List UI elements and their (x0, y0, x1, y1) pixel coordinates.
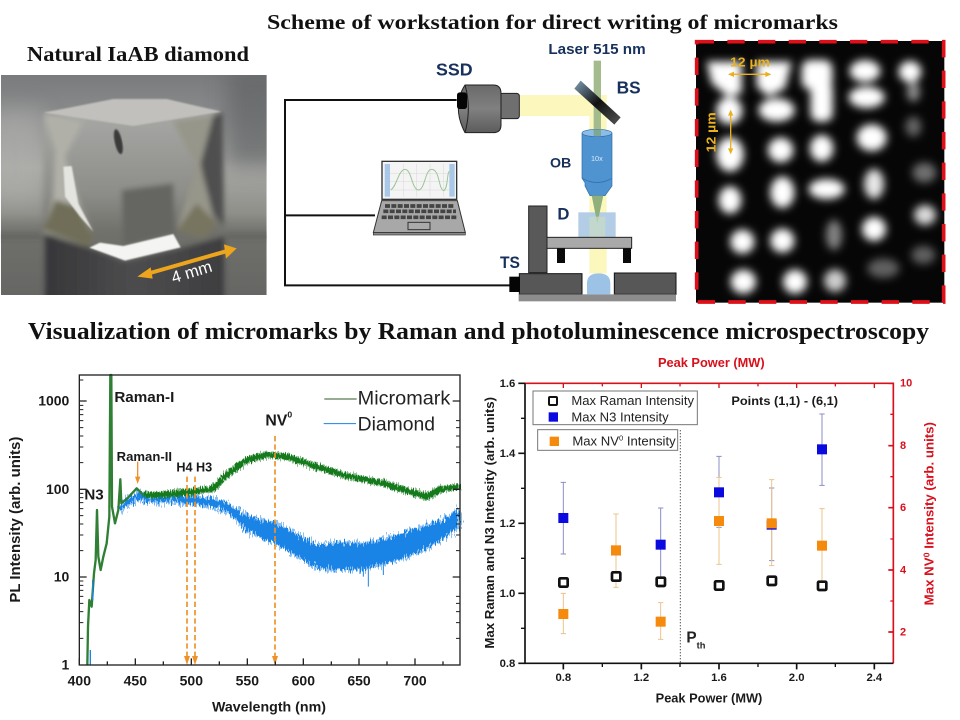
peak labels: NV (265, 412, 288, 429)
diamond spectrum (120, 492, 460, 570)
diamond spike (315, 557, 383, 587)
bright micromark spots (707, 60, 936, 294)
title: scheme of workstation: Scheme of workstation for direct writing of micromarks (267, 10, 838, 34)
x tick labels: 550 (236, 673, 259, 689)
bright reflection (63, 166, 93, 232)
threshold subscript: th (697, 641, 706, 651)
peak labels: 0 (287, 409, 292, 419)
chart: intensity versus peak power (482, 356, 936, 706)
left y tick labels: 1.6 (500, 378, 515, 390)
label: BS: BS (617, 77, 641, 97)
peak labels: H3 (196, 461, 212, 475)
title: natural diamond: Natural IaAB diamond (27, 42, 249, 66)
axes (518, 383, 893, 669)
spectrum legend: Diamond (358, 414, 435, 435)
legend: NV0: 0 (619, 434, 623, 443)
left axis title: Max Raman and N3 Intensity (arb. units) (482, 397, 497, 649)
panel: micromark image (696, 41, 944, 303)
x tick labels: 450 (124, 673, 147, 689)
detector SSD (457, 85, 519, 133)
x tick labels: 600 (292, 673, 315, 689)
right y tick labels: 10 (900, 378, 912, 390)
right axis title: 0 (921, 552, 931, 557)
label: TS: TS (500, 253, 520, 272)
legend: NV0 (538, 430, 678, 450)
bottom bright facet (89, 234, 181, 261)
connection wires (285, 100, 510, 285)
left y tick labels: 1.0 (500, 588, 515, 600)
x tick labels: 1.2 (633, 672, 649, 684)
spectrum legend: Micromark (358, 389, 451, 410)
threshold label: P (686, 630, 697, 647)
label: SSD: SSD (436, 59, 473, 79)
y tick labels: 10 (54, 569, 70, 585)
x tick labels: 2.4 (866, 672, 883, 684)
peak labels (84, 389, 292, 504)
chart: PL spectrum (8, 375, 460, 714)
x tick labels: 650 (347, 673, 371, 689)
x tick labels: 700 (403, 673, 427, 689)
Raman points (559, 572, 826, 590)
legend: Raman and N3: Max Raman Intensity (571, 394, 695, 408)
label: laser: Laser 515 nm (548, 42, 646, 58)
objective lens (582, 129, 612, 196)
x tick labels: 400 (68, 673, 91, 689)
x tick labels (68, 673, 427, 689)
title: visualization: Visualization of micromarks by Raman and photoluminescence microspectroscopy (28, 319, 929, 345)
legend: NV0: Intensity (623, 434, 676, 448)
bottom axis title: Peak Power (MW) (656, 692, 762, 706)
peak labels: Raman-I (114, 389, 174, 406)
y axis title: PL Intensity (arb. units) (8, 437, 24, 603)
right axis title: Intensity (arb. units) (921, 422, 936, 552)
y tick labels (38, 393, 70, 673)
label: OB: OB (550, 154, 571, 170)
horizontal 12 µm marker (728, 55, 771, 77)
green laser beam (594, 61, 601, 136)
error bars: NV0 (561, 477, 825, 639)
right y tick labels: 2 (900, 626, 906, 638)
diamond top face (43, 99, 222, 126)
left y tick labels: 1.2 (500, 518, 515, 530)
x tick labels: 2.0 (789, 672, 805, 684)
horizontal 12 µm marker: 12 µm (730, 55, 770, 69)
NV0 points (558, 516, 827, 627)
laptop (373, 161, 465, 235)
peak labels: N3 (84, 487, 104, 504)
beam splitter (574, 81, 621, 125)
right y tick labels: 6 (900, 502, 906, 514)
legend: Raman and N3: Max N3 Intensity (571, 410, 669, 424)
diamond inclusion (113, 128, 124, 155)
x tick labels: 1.6 (711, 672, 727, 684)
right y tick labels: 8 (900, 440, 906, 452)
legend: NV0: Max NV (572, 434, 617, 448)
translation stage (509, 206, 676, 301)
arrow: 4 mm scale (137, 244, 237, 279)
left y tick labels (500, 378, 516, 670)
diamond sample (578, 212, 616, 237)
dashed marker lines (187, 436, 275, 658)
left y tick labels: 1.4 (500, 448, 516, 460)
panel: diamond photograph (0, 67, 283, 300)
marker arrowheads (135, 462, 278, 665)
y tick labels: 100 (46, 481, 70, 497)
x tick labels: 500 (180, 673, 203, 689)
micromark spectrum (143, 455, 460, 497)
threshold line (679, 430, 682, 663)
label: D: D (557, 204, 569, 223)
yellow beam (520, 95, 607, 273)
vertical 12 µm marker (704, 110, 733, 154)
y tick labels: 1000 (38, 393, 70, 409)
vertical 12 µm marker: 12 µm (704, 112, 718, 152)
focused green cone (592, 196, 603, 223)
blue edge (90, 580, 93, 665)
x tick labels: 0.8 (555, 672, 571, 684)
y tick labels: 1 (62, 657, 70, 673)
right axis title: Max NV (921, 558, 936, 605)
N3 points (558, 444, 827, 555)
axes frame (79, 375, 460, 665)
dashed red frame (697, 42, 944, 302)
x tick labels (555, 672, 883, 684)
objective lens: 10x (591, 154, 603, 163)
low-wavelength rise (87, 375, 143, 665)
label: 4 mm: 4 mm (169, 257, 214, 287)
peak labels: H4 (176, 461, 193, 475)
peak labels: Raman-II (117, 449, 172, 464)
spectrum legend (324, 389, 451, 435)
x axis title: Wavelength (nm) (212, 698, 326, 714)
top axis title: Peak Power (MW) (658, 356, 765, 370)
right y tick labels: 4 (900, 564, 907, 576)
error bars: N3 (561, 414, 825, 581)
legend: Raman and N3 (533, 391, 697, 425)
panel: workstation scheme (285, 42, 676, 301)
right y tick labels (900, 378, 912, 638)
left y tick labels: 0.8 (500, 658, 515, 670)
points label: Points (1,1) - (6,1) (731, 394, 838, 408)
